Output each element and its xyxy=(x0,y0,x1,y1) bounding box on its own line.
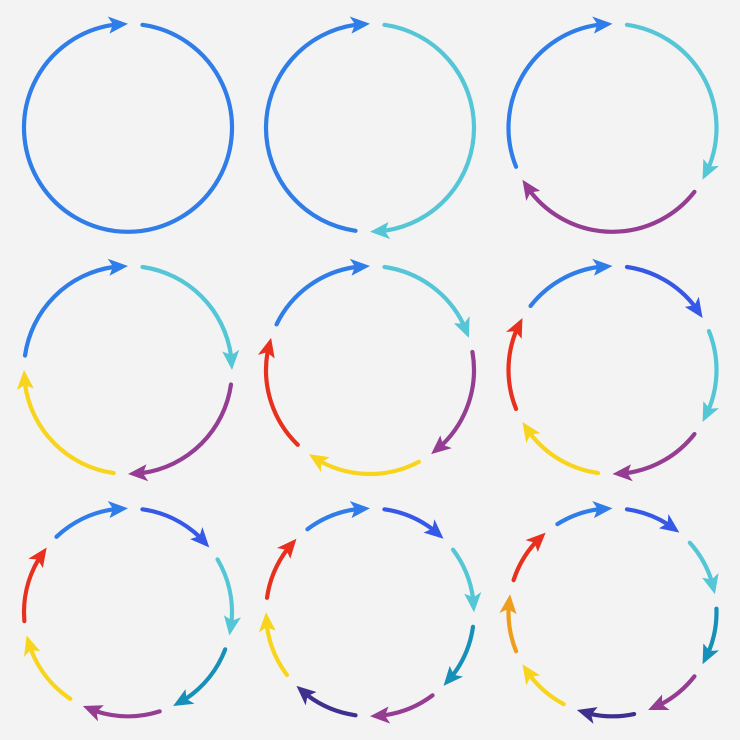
arrow: blue xyxy=(56,501,128,537)
arrow: yellow xyxy=(516,417,598,473)
arrow: purple xyxy=(645,676,694,717)
arrow: yellow xyxy=(516,659,564,704)
arrow: deep teal xyxy=(169,649,225,713)
arrow: blue xyxy=(266,16,370,231)
arrow: purple xyxy=(516,175,694,232)
arrow: purple xyxy=(612,434,694,481)
arrow: deep teal xyxy=(437,627,473,691)
panel: cycle with 7 arrows xyxy=(19,501,241,721)
arrow: yellow xyxy=(19,633,70,699)
arrow: purple xyxy=(128,384,231,481)
arrow: yellow xyxy=(17,370,114,473)
panel: cycle with 6 arrows xyxy=(506,259,719,481)
arrow: yellow xyxy=(305,446,419,474)
arrow: blue xyxy=(25,259,128,356)
panel: cycle with 1 arrow xyxy=(24,16,232,232)
arrow: royal blue xyxy=(627,509,684,540)
arrow: royal blue xyxy=(627,267,709,323)
arrow: blue xyxy=(508,16,612,167)
panel: cycle with 3 arrows xyxy=(508,16,719,232)
arrow: teal xyxy=(627,25,719,183)
arrow: blue xyxy=(557,501,612,524)
arrow: teal xyxy=(142,267,239,370)
arrow: orange xyxy=(499,593,520,651)
arrow: blue xyxy=(531,259,612,306)
arrow: blue xyxy=(277,259,370,324)
arrow: yellow xyxy=(259,612,287,675)
arrow: royal blue xyxy=(384,509,449,546)
arrow: indigo xyxy=(574,701,634,724)
arrow: royal blue xyxy=(142,509,215,554)
panel: cycle with 4 arrows xyxy=(17,259,239,481)
arrow: teal xyxy=(690,543,722,596)
arrow: purple xyxy=(80,697,160,721)
arrow: blue xyxy=(24,16,232,232)
arrow: red xyxy=(506,314,531,409)
arrow: indigo xyxy=(291,679,356,715)
arrow: blue xyxy=(307,501,370,529)
arrow: red xyxy=(514,527,552,580)
arrow: red xyxy=(258,336,298,445)
arrow: deep teal xyxy=(694,609,719,668)
panel: cycle with 9 arrows xyxy=(499,501,722,724)
arrow: purple xyxy=(370,695,433,724)
arrow: purple xyxy=(425,352,474,460)
arrow: teal xyxy=(370,25,474,239)
panel: cycle with 5 arrows xyxy=(258,259,476,474)
arrow: red xyxy=(24,543,54,621)
panel: cycle with 2 arrows xyxy=(266,16,474,239)
arrow: teal xyxy=(218,559,241,637)
panel: cycle with 8 arrows xyxy=(259,501,481,724)
arrow: teal xyxy=(694,331,719,426)
arrow: teal xyxy=(384,267,476,341)
arrow: red xyxy=(267,534,303,598)
arrow: teal xyxy=(453,550,481,612)
